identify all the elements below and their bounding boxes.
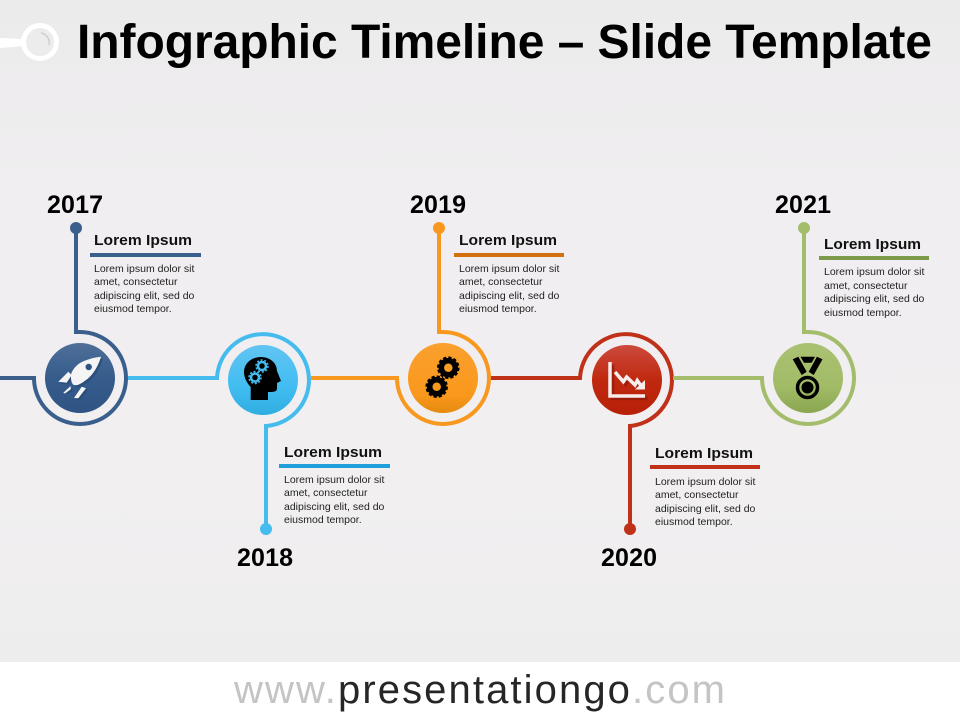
timeline step 2020 <box>491 334 760 572</box>
body text 2021: adipiscing elit, sed do <box>824 293 925 305</box>
body text 2019: amet, consectetur <box>459 276 543 288</box>
year 2021: 2021 <box>775 191 831 219</box>
icon: gears <box>427 358 458 397</box>
connector and ring 2017 <box>0 228 126 424</box>
icon disc 2018 <box>228 345 298 415</box>
body text 2021: amet, consectetur <box>824 280 908 292</box>
icon disc 2021 <box>773 343 843 413</box>
body text 2020: eiusmod tempor. <box>655 516 733 528</box>
heading 2019: Lorem Ipsum <box>459 232 557 249</box>
heading 2020: Lorem Ipsum <box>655 445 753 462</box>
body text 2017: adipiscing elit, sed do <box>94 290 195 302</box>
year 2017: 2017 <box>47 191 103 219</box>
body text 2020: Lorem ipsum dolor sit <box>655 476 755 488</box>
body text 2020: amet, consectetur <box>655 489 739 501</box>
timeline step 2019 <box>311 191 564 424</box>
body text 2017: Lorem ipsum dolor sit <box>94 263 194 275</box>
body text 2021: eiusmod tempor. <box>824 307 902 319</box>
body text 2018: adipiscing elit, sed do <box>284 501 385 513</box>
year 2020: 2020 <box>601 544 657 572</box>
timeline step 2017 <box>0 191 201 424</box>
underline 2017 <box>90 253 201 257</box>
pin dot 2019 <box>433 222 445 234</box>
icon disc 2020 <box>592 345 662 415</box>
body text 2019: adipiscing elit, sed do <box>459 290 560 302</box>
title: Infographic Timeline – Slide Template <box>77 16 932 69</box>
connector and ring 2019 <box>311 228 489 424</box>
body text 2018: amet, consectetur <box>284 487 368 499</box>
timeline step 2018 <box>128 334 390 572</box>
underline 2020 <box>650 465 760 469</box>
body text 2019: eiusmod tempor. <box>459 303 537 315</box>
body text 2017: amet, consectetur <box>94 276 178 288</box>
heading 2018: Lorem Ipsum <box>284 444 382 461</box>
timeline step 2021 <box>673 191 929 424</box>
icon: falling chart <box>610 362 648 398</box>
pin dot 2021 <box>798 222 810 234</box>
heading 2021: Lorem Ipsum <box>824 236 921 253</box>
pin dot 2018 <box>260 523 272 535</box>
title bullet icon <box>0 26 56 58</box>
icon disc 2019 <box>408 343 478 413</box>
icon disc 2017 <box>45 343 115 413</box>
year 2018: 2018 <box>237 544 293 572</box>
connector and ring 2020 <box>491 334 672 529</box>
icon: medal <box>793 357 822 398</box>
heading 2017: Lorem Ipsum <box>94 232 192 249</box>
body text 2019: Lorem ipsum dolor sit <box>459 263 559 275</box>
connector and ring 2018 <box>128 334 309 529</box>
body text 2020: adipiscing elit, sed do <box>655 503 756 515</box>
underline 2019 <box>454 253 564 257</box>
body text 2018: Lorem ipsum dolor sit <box>284 474 384 486</box>
underline 2021 <box>819 256 929 260</box>
pin dot 2020 <box>624 523 636 535</box>
body text 2021: Lorem ipsum dolor sit <box>824 266 924 278</box>
body text 2017: eiusmod tempor. <box>94 303 172 315</box>
connector and ring 2021 <box>673 228 854 424</box>
icon: rocket <box>58 357 103 400</box>
body text 2018: eiusmod tempor. <box>284 514 362 526</box>
underline 2018 <box>279 464 390 468</box>
year 2019: 2019 <box>410 191 466 219</box>
icon: head with gears <box>244 357 281 400</box>
footer website address: www.presentationgo.com <box>233 668 725 712</box>
pin dot 2017 <box>70 222 82 234</box>
